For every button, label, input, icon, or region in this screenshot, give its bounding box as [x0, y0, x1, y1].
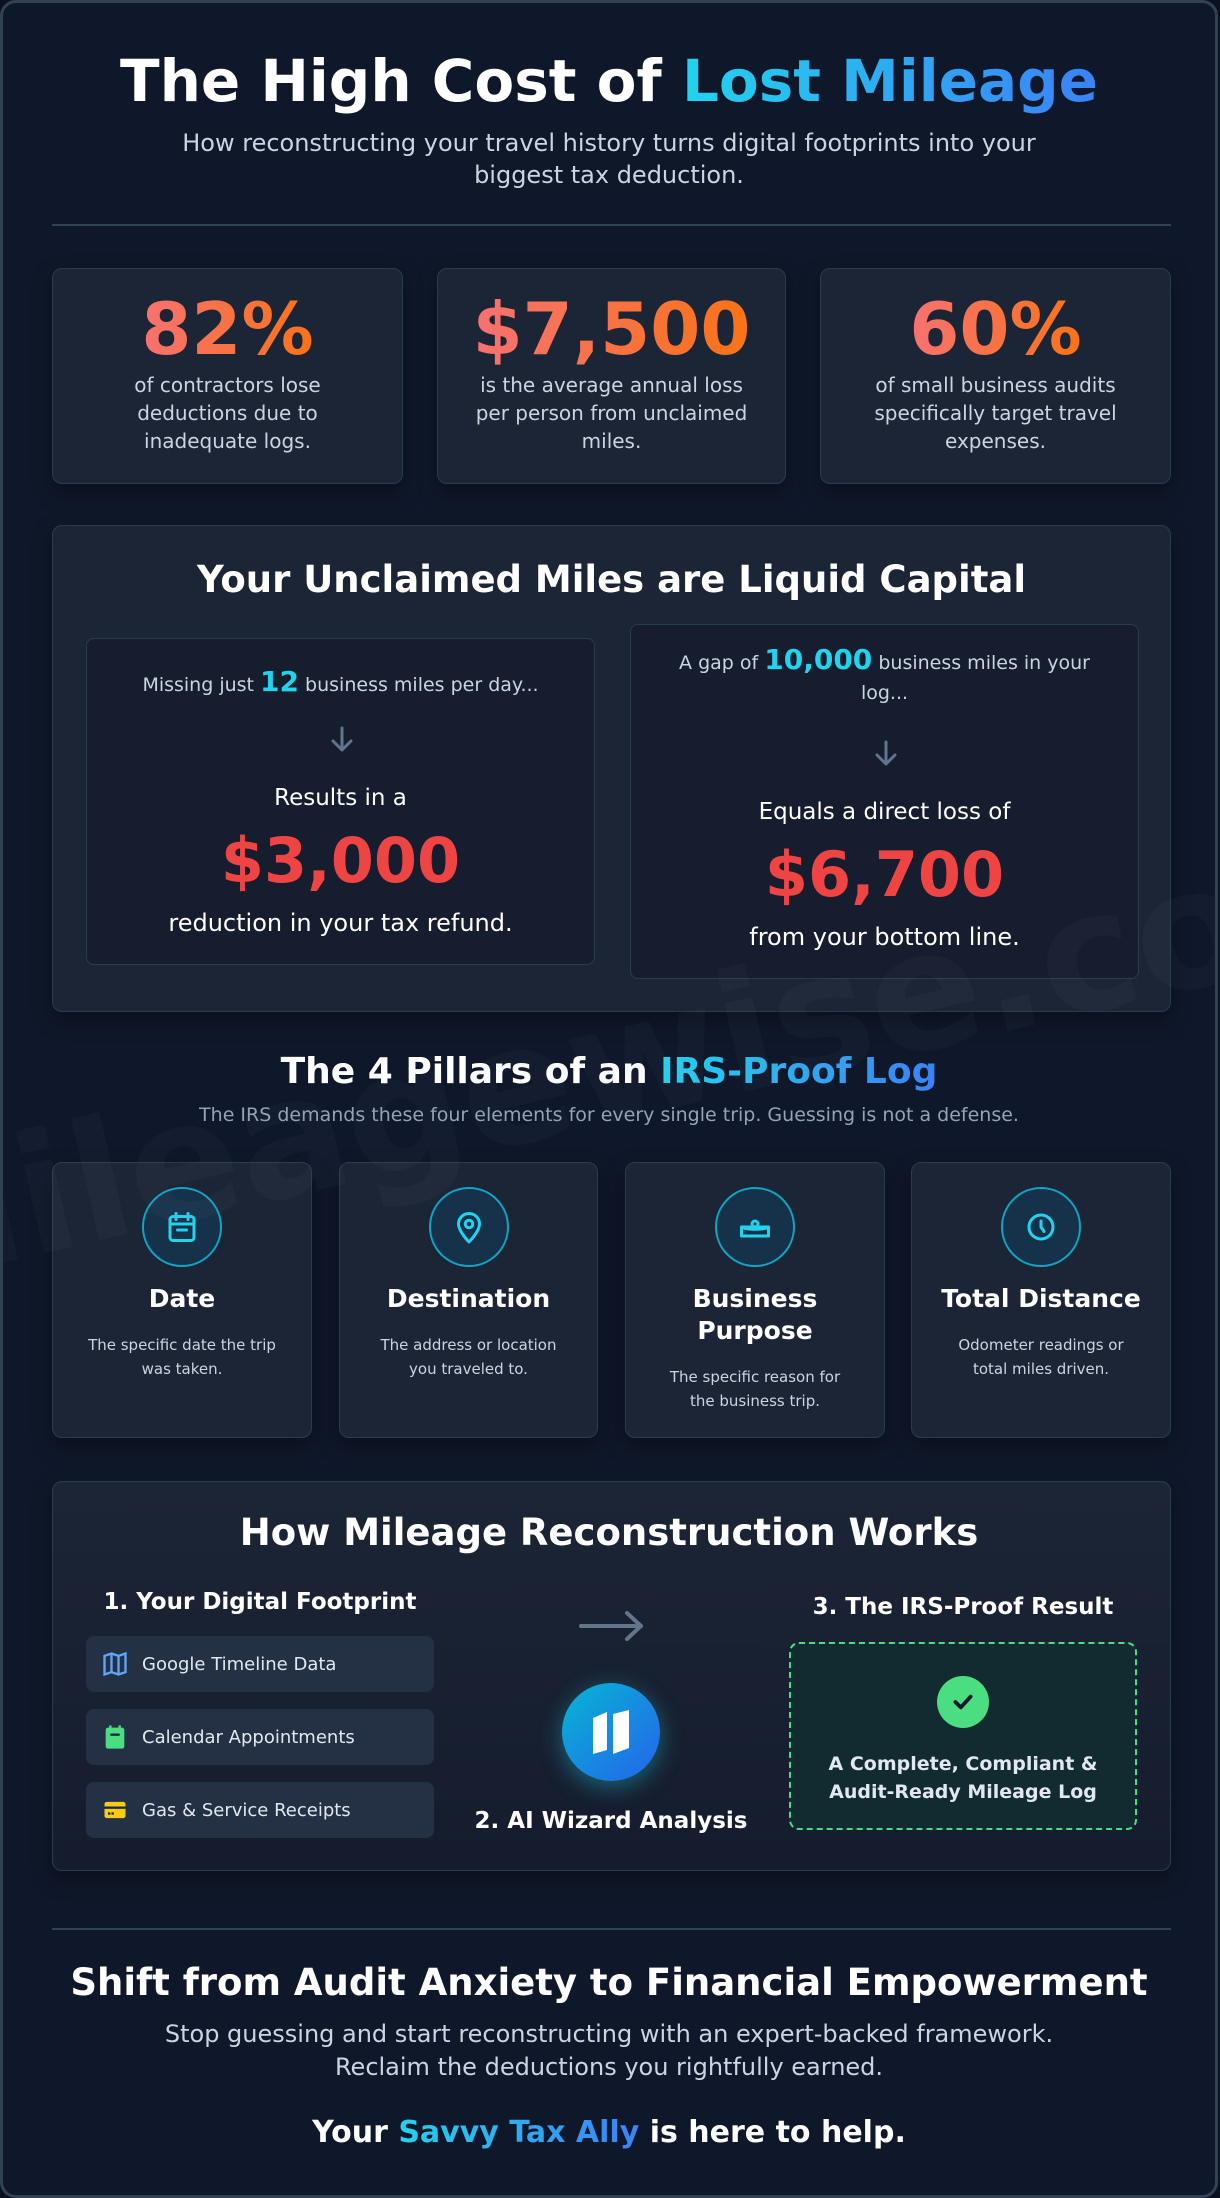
heading: Your Unclaimed Miles are Liquid Capital — [197, 558, 1026, 601]
closing text — [165, 2020, 1053, 2081]
icon: clock — [1001, 1187, 1081, 1267]
arrow down — [876, 740, 896, 766]
item: calendar — [86, 1709, 434, 1765]
stat card: $7,500: is the average annual loss per person from unclaimed miles. — [476, 373, 747, 453]
step 1 heading: 1. Your Digital Footprint — [104, 1589, 416, 1615]
box: 12 miles: reduction in your tax refund. — [168, 909, 513, 937]
box: 10,000 miles: from your bottom line. — [749, 923, 1020, 951]
box: 12 miles: $3,000 — [221, 824, 460, 897]
stat card: 60% — [820, 268, 1171, 484]
item: receipts — [86, 1782, 434, 1838]
item: calendar: Calendar Appointments — [142, 1726, 355, 1748]
heading: how: How Mileage Reconstruction Works — [240, 1511, 978, 1554]
pillar: date: The specific date the trip was taken. — [88, 1336, 276, 1378]
item: google timeline — [86, 1636, 434, 1692]
stat card: 60%: of small business audits specifically target travel expenses. — [874, 373, 1117, 453]
panel: how it works — [52, 1481, 1171, 1871]
box: 10,000 miles: A gap of 10,000 business miles in your — [679, 643, 1090, 676]
icon: calendar — [142, 1187, 222, 1267]
result box: Audit-Ready Mileage Log — [829, 1781, 1097, 1803]
arrow down — [332, 726, 352, 752]
closing text: Stop guessing and start reconstructing with an expert-backed framework. — [165, 2020, 1053, 2048]
title: The High Cost of Lost Mileage — [120, 47, 1098, 115]
closing heading: Shift from Audit Anxiety to Financial Empowerment — [70, 1961, 1148, 2004]
pillar: total distance — [911, 1162, 1171, 1438]
stat card: 82% — [52, 268, 403, 484]
arrow right — [579, 1610, 644, 1642]
pillar: business purpose: Purpose — [697, 1316, 813, 1345]
panel: liquid capital — [52, 525, 1171, 1012]
item: google timeline: Google Timeline Data — [142, 1654, 336, 1674]
pillar: destination — [339, 1162, 598, 1438]
step 2 label: 2. AI Wizard Analysis — [475, 1808, 747, 1834]
box: 12 miles: Results in a — [274, 785, 407, 811]
step 3 heading: 3. The IRS-Proof Result — [813, 1594, 1113, 1620]
box: 12 miles: Missing just 12 business miles per day... — [142, 665, 539, 698]
pillar: date — [52, 1162, 312, 1438]
box: 10,000 miles: log... — [861, 682, 908, 704]
pillar: date: Date — [149, 1284, 215, 1313]
icon: briefcase — [715, 1187, 795, 1267]
box: 12 miles — [86, 638, 595, 965]
stat card: 82%: of contractors lose deductions due to inadequate logs. — [134, 373, 321, 453]
pillars subtitle: The IRS demands these four elements for every single trip. Guessing is not a defense. — [199, 1104, 1019, 1126]
pillar: destination: The address or location you traveled to. — [380, 1336, 556, 1378]
icon: AI wizard — [562, 1683, 660, 1781]
closing text: Reclaim the deductions you rightfully earned. — [335, 2053, 883, 2081]
item: receipts: Gas & Service Receipts — [142, 1800, 351, 1820]
box: 10,000 miles — [630, 624, 1139, 979]
icon: check — [937, 1676, 989, 1728]
box: 10,000 miles: $6,700 — [765, 838, 1004, 911]
result box — [789, 1642, 1137, 1830]
closing tagline: Your Savvy Tax Ally is here to help. — [312, 2115, 906, 2150]
icon: pin — [428, 1187, 508, 1267]
pillar: business purpose: Business — [693, 1284, 817, 1313]
stat card: $7,500: $7,500 — [473, 287, 750, 371]
pillar: business purpose — [625, 1162, 885, 1438]
pillar: destination: Destination — [387, 1284, 550, 1313]
stat card: 60%: 60% — [909, 287, 1082, 371]
box: 10,000 miles: Equals a direct loss of — [759, 799, 1010, 825]
pillar: business purpose: The specific reason for the business trip. — [670, 1368, 840, 1410]
pillars heading: The 4 Pillars of an IRS-Proof Log — [281, 1051, 937, 1092]
pillar: total distance: Odometer readings or total miles driven. — [958, 1336, 1124, 1378]
subtitle: How reconstructing your travel history turns digital footprints into your biggest tax deduction. — [182, 129, 1036, 189]
pillar: total distance: Total Distance — [941, 1284, 1141, 1313]
result box: A Complete, Compliant & — [829, 1753, 1097, 1775]
stat card: $7,500 — [437, 268, 786, 484]
stat card: 82%: 82% — [141, 287, 314, 371]
